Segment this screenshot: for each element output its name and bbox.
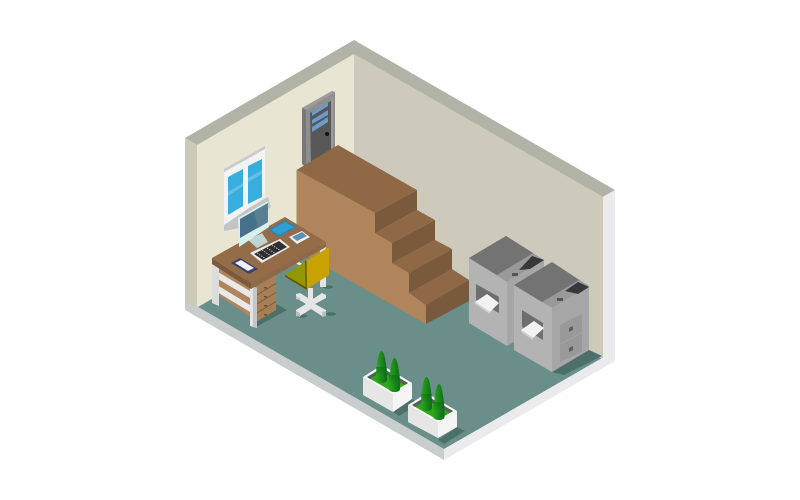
chair back bbox=[306, 247, 329, 289]
planter 2 bbox=[408, 377, 465, 444]
front legs bbox=[212, 262, 219, 306]
copier shadow bbox=[552, 350, 602, 375]
copier 1 bbox=[469, 236, 544, 346]
left wall bbox=[197, 54, 354, 308]
monitor bbox=[238, 201, 269, 247]
tablet bbox=[268, 220, 297, 237]
plants bbox=[376, 351, 400, 392]
steps bbox=[375, 190, 417, 233]
chair base bbox=[296, 288, 326, 316]
copier drawers bbox=[560, 314, 582, 344]
stairs bbox=[296, 145, 469, 324]
planter 1 bbox=[363, 351, 420, 416]
phone bbox=[289, 231, 310, 244]
wall top bbox=[185, 40, 615, 197]
right wall end bbox=[603, 190, 615, 361]
copier 2 bbox=[514, 262, 589, 372]
room shell bbox=[185, 40, 615, 460]
plants bbox=[421, 377, 444, 420]
rear rail and leg bbox=[295, 260, 305, 268]
right wall bbox=[354, 54, 603, 360]
landing bbox=[296, 145, 417, 213]
keyboard bbox=[250, 239, 290, 263]
desk edge bbox=[212, 258, 251, 289]
desktop bbox=[212, 217, 326, 283]
floor shadow under desk bbox=[250, 304, 287, 327]
modesty panel bbox=[218, 265, 252, 318]
desk bbox=[212, 201, 326, 328]
floor slab right bbox=[444, 358, 615, 460]
floor bbox=[198, 216, 602, 449]
window bbox=[224, 146, 271, 231]
left wall end bbox=[185, 138, 197, 308]
chair rear post bbox=[320, 276, 326, 287]
chair shadows bbox=[323, 285, 333, 289]
monitor stand bbox=[248, 233, 268, 248]
stair front side bbox=[296, 170, 426, 324]
floor slab left bbox=[185, 303, 444, 460]
notebook on desk bbox=[231, 258, 258, 274]
chair seat bbox=[285, 261, 307, 289]
frame rails bbox=[218, 272, 250, 298]
chair bbox=[285, 247, 336, 318]
drawer unit bbox=[256, 273, 276, 322]
door bbox=[302, 91, 335, 167]
